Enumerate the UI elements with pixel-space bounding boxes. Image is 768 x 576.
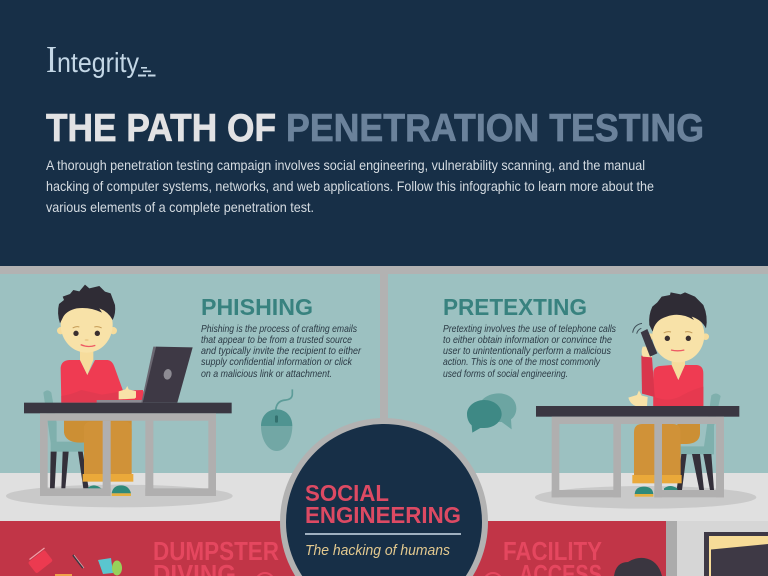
icon: speech bubbles [467, 393, 516, 433]
logo: Integrity [46, 39, 156, 81]
heading: social engineering [305, 480, 461, 528]
header panel [0, 0, 768, 266]
panel: phishing [6, 285, 361, 507]
title: THE PATH OF [46, 107, 276, 150]
title: PENETRATION TESTING [286, 107, 704, 150]
icons: trash items [28, 548, 122, 576]
table frame [40, 413, 216, 496]
phishing description: and typically invite the recipient to either [201, 345, 361, 357]
person head [614, 558, 662, 576]
panel: pretexting [443, 292, 756, 509]
sweater and arm [653, 365, 703, 406]
title [46, 107, 704, 150]
phishing description: that appear to be from a trusted source [201, 334, 352, 346]
pretexting description: user to unintentionally perform a malicious [443, 345, 612, 357]
heading: social engineering: SOCIAL [305, 480, 389, 506]
icon: search circle [256, 573, 274, 576]
icon: mouse [261, 389, 292, 451]
heading: facility access [503, 536, 602, 576]
logo: Integrity: ntegrity [57, 47, 139, 78]
pretexting description: to either obtain information or convince the [443, 334, 612, 346]
divider and right panel [666, 521, 768, 576]
phishing description: supply confidential information or click [201, 356, 353, 368]
intro text: various elements of a complete penetration test. [46, 199, 314, 215]
phishing description [201, 323, 361, 380]
intro text [46, 157, 654, 215]
social engineering section background [0, 266, 768, 521]
illustration: person at laptop [6, 285, 233, 507]
sweater [61, 360, 143, 403]
heading: dumpster diving [153, 536, 279, 576]
phishing description: on a malicious link or attachment. [201, 368, 332, 380]
table frame [552, 417, 724, 497]
icon: search circle [484, 573, 502, 576]
pretexting description: Pretexting involves the use of telephone calls [443, 323, 617, 335]
logo: Integrity: I [46, 39, 57, 81]
heading: pretexting: PRETEXTING [443, 294, 587, 320]
central circle: social engineering [280, 418, 488, 576]
phishing description: Phishing is the process of crafting emails [201, 323, 358, 335]
head [57, 285, 117, 353]
panel: dumpster diving [0, 521, 666, 576]
panel: facility access [484, 521, 768, 576]
heading: dumpster diving: DUMPSTER [153, 536, 279, 566]
heading: facility access: FACILITY [503, 536, 602, 566]
subtitle: The hacking of humans [305, 542, 450, 559]
pretexting description: used forms of social engineering. [443, 368, 568, 380]
heading: social engineering: ENGINEERING [305, 502, 461, 528]
pretexting description: action. This is one of the most commonly [443, 356, 601, 368]
intro text: A thorough penetration testing campaign involves social engineering, vulnerability scanning, and the manual [46, 157, 645, 173]
heading: phishing: PHISHING [201, 294, 313, 320]
illustration: person on phone [535, 292, 756, 509]
intro text: hacking of computer systems, networks, and web applications. Follow this infographic to learn more about the [46, 178, 654, 194]
pretexting description [443, 323, 617, 380]
monitor [704, 532, 768, 576]
